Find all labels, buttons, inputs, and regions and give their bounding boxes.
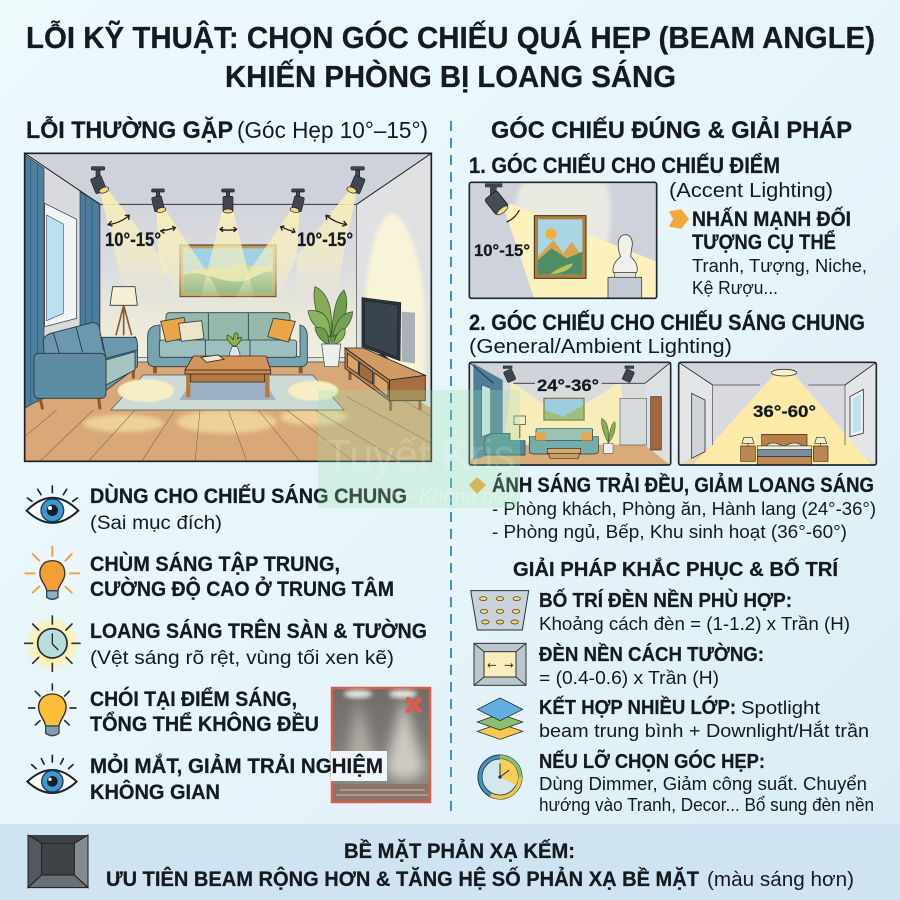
subheading: accent lighting: (Accent Lighting) (669, 180, 833, 202)
text: even light: - Phòng ngủ, Bếp, Khu sinh hoạt (36°-60°) (492, 522, 847, 542)
footer band (0, 824, 900, 900)
beams (101, 192, 356, 302)
text: layering: Spotlight (741, 698, 820, 718)
picture (180, 245, 276, 297)
text: downlight spacing: Khoảng cách đèn = (1-1.2) x Trần (H) (539, 614, 850, 634)
watermark: Tuyết Kris (325, 431, 515, 480)
icon: clock with glow (24, 616, 81, 672)
heading: accent beam angle: 1. GÓC CHIẾU CHO CHIẾU ĐIỂM (469, 153, 780, 178)
icon: eye (27, 486, 78, 523)
spot lamps (90, 167, 365, 213)
text: distance from wall: ĐÈN NỀN CÁCH TƯỜNG: (539, 642, 764, 666)
heading: correct angle and solutions: GÓC CHIẾU ĐÚNG & GIẢI PHÁP (491, 115, 852, 144)
floor light pools (83, 408, 347, 433)
icon: orange arrow (670, 210, 688, 228)
main sofa (148, 313, 307, 373)
illustration: spotlight on painting and bust (469, 182, 657, 298)
armchair sofa (34, 323, 138, 409)
text: narrow angle remedy: NẾU LỠ CHỌN GÓC HẸP: (539, 749, 765, 773)
text: even light (492, 474, 876, 542)
text: downlight spacing (539, 588, 850, 634)
text: highlight objects: NHẤN MẠNH ĐỐI (692, 207, 851, 231)
watermark: n - Không gian (390, 486, 520, 506)
text: low reflectance surfaces (106, 840, 854, 891)
text: distance from wall (539, 642, 764, 688)
heading: general beam angle: 2. GÓC CHIẾU CHO CHIẾU SÁNG CHUNG (469, 310, 865, 335)
heading: fixes: GIẢI PHÁP KHẮC PHỤC & BỐ TRÍ (513, 557, 838, 581)
plant (308, 287, 353, 367)
text: distance from wall: = (0.4-0.6) x Trần (H) (539, 668, 719, 688)
text: even light: - Phòng khách, Phòng ăn, Hành lang (24°-36°) (492, 499, 876, 519)
heading: common mistakes: (Góc Hẹp 10°–15°) (237, 117, 428, 143)
text: highlight objects: Tranh, Tượng, Niche, (692, 256, 867, 276)
list: problems (24, 484, 430, 804)
icon: dimmer dial (478, 755, 522, 799)
text: glare: CHÓI TẠI ĐIỂM SÁNG, (90, 687, 297, 711)
text: light spill on floor and wall: LOANG SÁNG TRÊN SÀN & TƯỜNG (90, 619, 427, 643)
label: 36-60 degrees: 36°-60° (753, 402, 816, 421)
icon: orange marker (469, 477, 486, 494)
text: highlight objects (692, 207, 867, 298)
curtains and window (25, 155, 99, 408)
illustration: living room with narrow beams (25, 153, 431, 461)
icon: tired eye (27, 755, 77, 793)
vase (227, 333, 242, 361)
label: right beam angle: 10°-15° (297, 230, 353, 251)
text: layering (539, 695, 869, 741)
text: focused beam (90, 552, 394, 601)
icon: yellow bulb (29, 684, 76, 736)
icon: layers (477, 698, 523, 739)
photo: uneven spotlights on wall with red cross (332, 688, 430, 802)
text: highlight objects: TƯỢNG CỤ THỂ (692, 231, 836, 254)
text: low reflectance surfaces: (màu sáng hơn) (707, 869, 854, 891)
heading: common mistakes (26, 115, 428, 144)
text: eye strain: KHÔNG GIAN (90, 780, 220, 804)
text: eye strain (90, 754, 383, 804)
label: left beam angle: 10°-15° (105, 230, 161, 251)
text: glare (90, 687, 319, 736)
text: narrow angle remedy: hướng vào Tranh, Decor... Bổ sung đèn nền (539, 795, 874, 815)
section 2: general lighting (469, 310, 876, 542)
text: focused beam: CHÙM SÁNG TẬP TRUNG, (90, 552, 340, 576)
rug (111, 375, 344, 410)
text: light spill on floor and wall (90, 619, 427, 669)
coffee table (185, 355, 271, 397)
text: focused beam: CƯỜNG ĐỘ CAO Ở TRUNG TÂM (90, 577, 394, 601)
text: highlight objects: Kệ Rượu... (692, 278, 778, 298)
title (26, 19, 875, 94)
text: layering: KẾT HỢP NHIỀU LỚP: (539, 695, 736, 719)
section 1: accent lighting (469, 153, 867, 298)
text: eye strain: MỎI MẮT, GIẢM TRẢI NGHIỆM (90, 754, 383, 778)
icon: dark surface room (28, 835, 88, 888)
text: light spill on floor and wall: (Vệt sáng rõ rệt, vùng tối xen kẽ) (90, 648, 394, 669)
floor lamp (110, 287, 137, 335)
icon: orange bulb (25, 547, 79, 599)
label: accent angle: 10°-15° (474, 241, 530, 260)
label: 24-36 degrees: 24°-36° (537, 376, 599, 395)
text: general lighting misuse: DÙNG CHO CHIẾU SÁNG CHUNG (90, 484, 407, 508)
text: low reflectance surfaces: BỀ MẶT PHẢN XẠ KẾM: (344, 840, 575, 863)
text: low reflectance surfaces: ƯU TIÊN BEAM RỘNG HƠN & TĂNG HỆ SỐ PHẢN XẠ BỀ MẶT (106, 867, 699, 891)
illustration: bedroom 36-60 degrees (679, 362, 876, 465)
subheading: ambient lighting: (General/Ambient Lighting) (469, 336, 732, 358)
text: narrow angle remedy (539, 749, 874, 815)
text: layering: beam trung bình + Downlight/Hắt trần (539, 720, 869, 741)
watermark (318, 390, 520, 508)
text: downlight spacing: BỐ TRÍ ĐÈN NỀN PHÙ HỢP: (539, 588, 792, 612)
icon: wall distance (474, 643, 526, 685)
TV and console (345, 298, 425, 411)
text: glare: TỔNG THỂ KHÔNG ĐỀU (90, 712, 319, 736)
angle arcs (108, 215, 347, 233)
title: LỖI KỸ THUẬT: CHỌN GÓC CHIẾU QUÁ HẸP (BEAM ANGLE) (26, 19, 875, 55)
text: general lighting misuse (90, 484, 407, 534)
icon: downlight grid (471, 591, 529, 630)
text: general lighting misuse: (Sai mục đích) (90, 513, 222, 534)
section: fixes and layout (471, 557, 874, 815)
illustration: living room 24-36 degrees (469, 362, 671, 465)
heading: common mistakes: LỖI THƯỜNG GẶP (26, 115, 233, 144)
text: narrow angle remedy: Dùng Dimmer, Giảm công suất. Chuyển (539, 774, 867, 794)
title: KHIẾN PHÒNG BỊ LOANG SÁNG (225, 58, 676, 94)
